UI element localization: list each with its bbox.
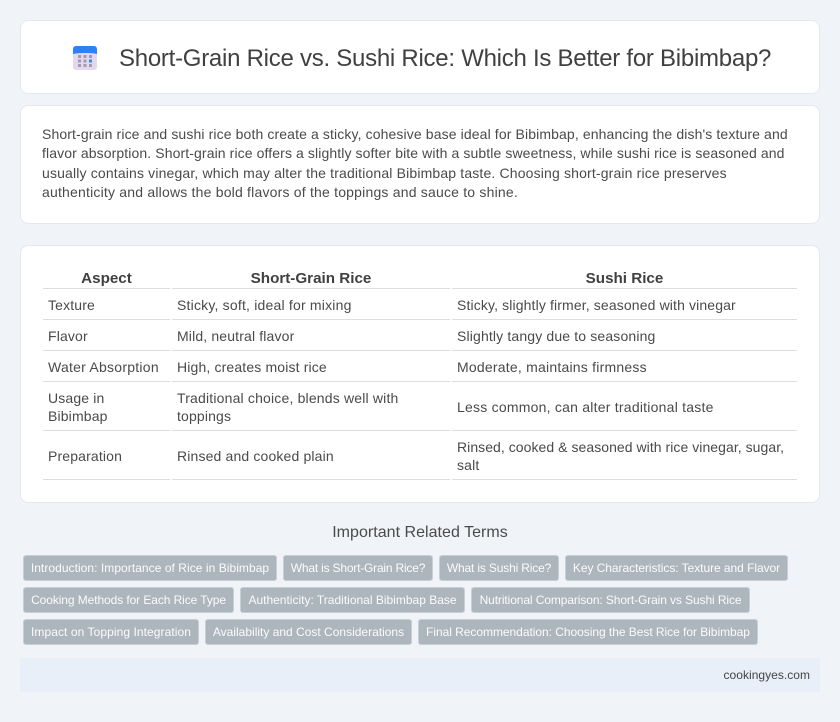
row: flavor [48,328,655,344]
table header: Aspect [81,270,132,287]
row: usage in bibimbap: Usage in [48,390,104,406]
panel: comparison table [20,245,820,503]
icon: calendar [73,46,97,70]
panel: introduction [20,105,820,224]
row: preparation: Preparation [48,448,122,464]
related terms tags: Nutritional Comparison: Short-Grain vs Sushi Rice [480,593,741,607]
row: preparation: Rinsed, cooked & seasoned with rice vinegar, sugar, [457,439,784,455]
related terms tags: Authenticity: Traditional Bibimbap Base [248,593,457,607]
intro text: flavor absorption. Short-grain rice offers a slightly softer bite with a subtle sweetness, while sushi rice is seasoned and [42,145,785,161]
row: usage in bibimbap: Less common, can alter traditional taste [457,399,714,415]
intro text [42,126,788,200]
related terms tags: Availability and Cost Considerations [213,625,404,639]
row: flavor: Mild, neutral flavor [177,328,294,344]
row: usage in bibimbap: Traditional choice, blends well with [177,390,399,406]
row: preparation: Rinsed and cooked plain [177,448,334,464]
related terms tags: Cooking Methods for Each Rice Type [31,593,226,607]
intro text: Short-grain rice and sushi rice both create a sticky, cohesive base ideal for Bibimbap, enhancing the dish's texture and [42,126,788,142]
related terms tags [23,555,788,645]
footer [20,658,820,692]
row: water absorption: Moderate, maintains firmness [457,359,647,375]
heading: related terms: Important Related Terms [332,524,508,541]
row: usage in bibimbap: Bibimbap [48,408,108,424]
row: water absorption: Water Absorption [48,359,159,375]
related terms tags: Introduction: Importance of Rice in Bibimbap [31,561,269,575]
row: flavor: Flavor [48,328,88,344]
row: texture: Sticky, soft, ideal for mixing [177,297,352,313]
related terms tags: Final Recommendation: Choosing the Best Rice for Bibimbap [426,625,750,639]
related terms tags: Impact on Topping Integration [31,625,191,639]
row: flavor: Slightly tangy due to seasoning [457,328,655,344]
row: water absorption: High, creates moist rice [177,359,327,375]
table header: Sushi Rice [586,270,663,287]
title card [20,20,820,94]
row: texture: Texture [48,297,95,313]
table header: Short-Grain Rice [251,270,371,287]
related terms tags: What is Short-Grain Rice? [291,561,425,575]
row: preparation [48,439,784,473]
row: texture [48,297,736,313]
row: preparation: salt [457,457,479,473]
row: texture: Sticky, slightly firmer, seasoned with vinegar [457,297,736,313]
intro text: authenticity and allows the bold flavors of the toppings and sauce to shine. [42,184,518,200]
table header [81,270,663,287]
title: Short-Grain Rice vs. Sushi Rice: Which Is Better for Bibimbap? [119,45,771,72]
row: usage in bibimbap [48,390,714,424]
intro text: usually contains vinegar, which may alter the traditional Bibimbap taste. Choosing short-grain rice preserves [42,165,727,181]
row: usage in bibimbap: toppings [177,408,231,424]
related terms tags: What is Sushi Rice? [447,561,551,575]
related terms tags: Key Characteristics: Texture and Flavor [573,561,780,575]
row: water absorption [48,359,647,375]
footer source: cookingyes.com [724,668,810,682]
